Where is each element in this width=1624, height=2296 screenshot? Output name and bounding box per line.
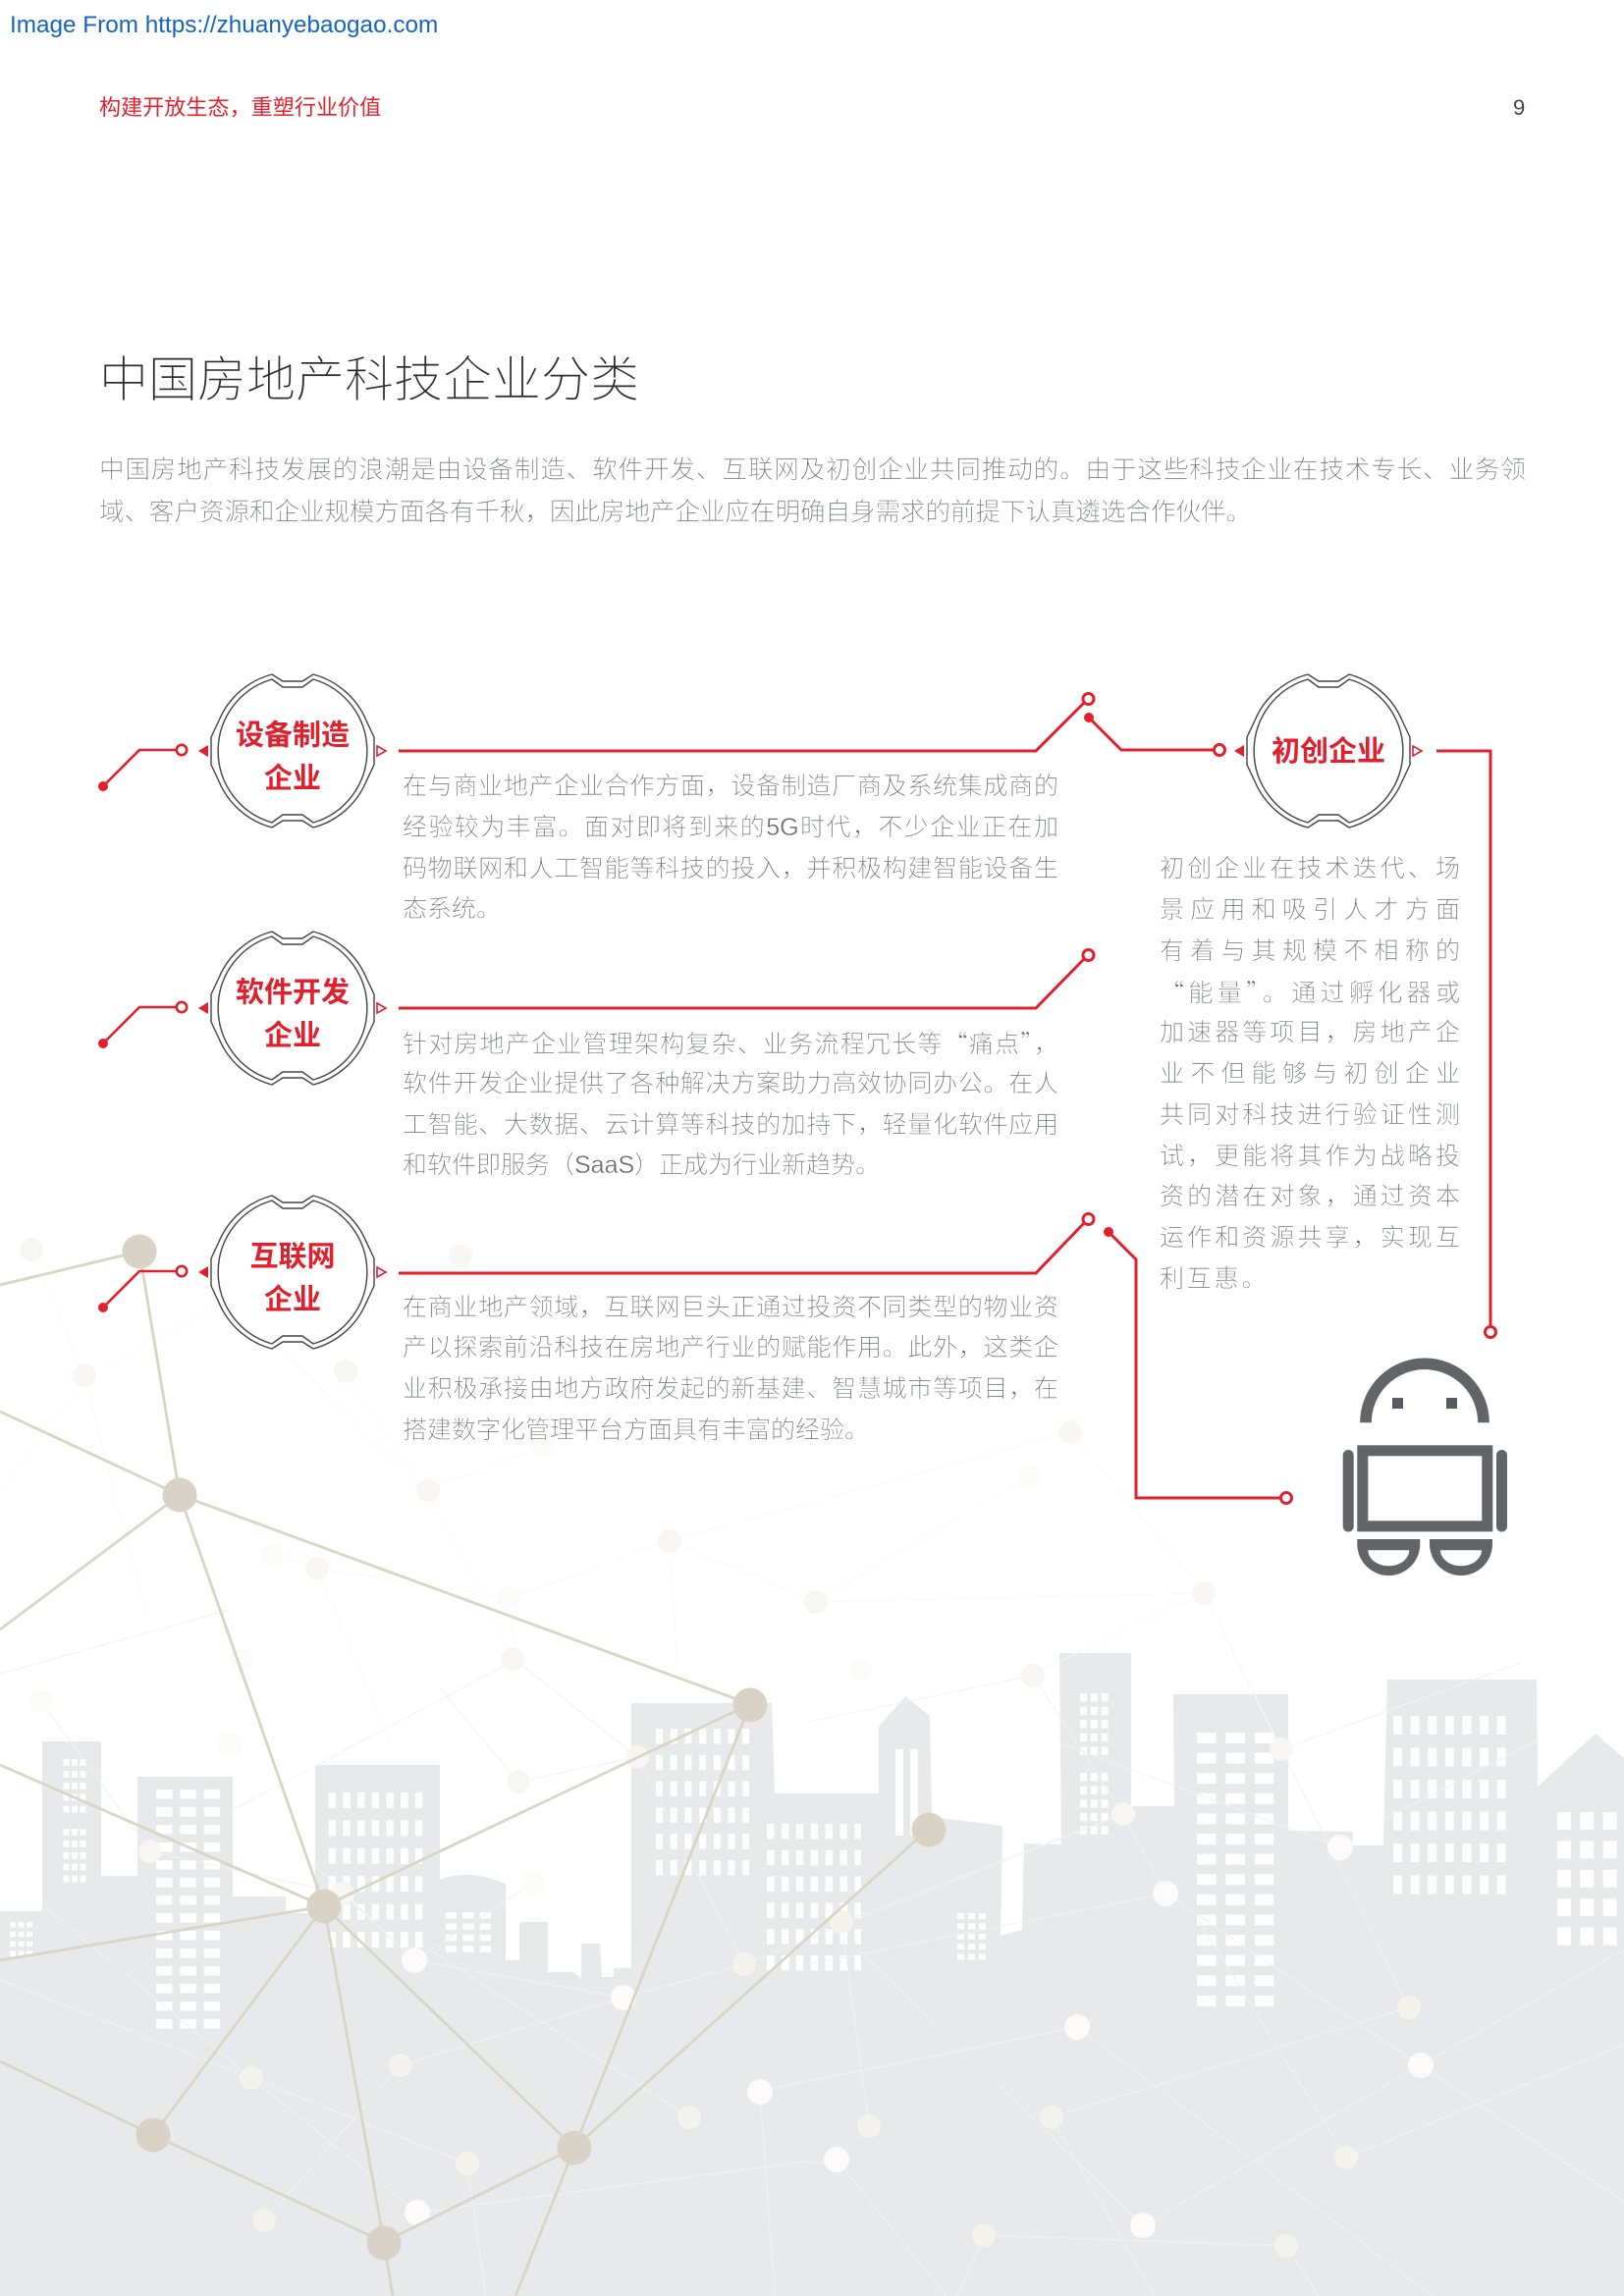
paragraph: 初创企业: 景应用和吸引人才方面 [1160,896,1460,924]
connector: 互联网 [399,1213,1094,1273]
section header: 构建开放生态，重塑行业价值 [99,95,381,120]
paragraph: 初创企业: 试，更能将其作为战略投 [1160,1143,1460,1170]
badge: 设备制造企业 [98,674,386,828]
paragraph: 初创企业: 共同对科技进行验证性测 [1160,1101,1460,1129]
paragraph: 初创企业: 业不但能够与初创企业 [1160,1060,1460,1088]
city skyline [0,1653,1624,2296]
paragraph: 初创企业: 运作和资源共享，实现互 [1160,1224,1460,1252]
badge: 软件开发企业 [98,932,386,1085]
badge: 软件开发企业: 企业 [264,1019,321,1052]
connector: 初创企业 down to robot [1436,751,1496,1337]
paragraph: 软件开发企业: 软件开发企业提供了各种解决方案助力高效协同办公。在人 [403,1070,1058,1097]
paragraph: 软件开发企业: 工智能、大数据、云计算等科技的加持下，轻量化软件应用 [403,1111,1058,1139]
paragraph: 初创企业 [1160,855,1460,1293]
paragraph: 设备制造企业: 在与商业地产企业合作方面，设备制造厂商及系统集成商的 [403,773,1058,800]
paragraph: 设备制造企业 [403,773,1058,923]
paragraph: 设备制造企业: 态系统。 [403,895,501,923]
paragraph: 初创企业: 利互惠。 [1160,1265,1269,1293]
icon: robot [1343,1363,1507,1575]
badge: 互联网企业: 企业 [264,1284,321,1315]
badge: 互联网企业: 互联网 [249,1241,336,1272]
badge: 设备制造企业: 企业 [264,762,321,795]
paragraph: 初创企业: 加速器等项目，房地产企 [1160,1019,1460,1046]
title: 中国房地产科技企业分类 [99,352,639,407]
connector: down to robot [1104,1227,1292,1504]
badge: 互联网企业 [98,1196,386,1349]
faint network lines [0,1250,1624,2296]
paragraph: 设备制造企业: 码物联网和人工智能等科技的投入，并积极构建智能设备生 [403,855,1058,882]
paragraph: 互联网企业: 在商业地产领域，互联网巨头正通过投资不同类型的物业资 [403,1294,1058,1321]
intro text: 中国房地产科技发展的浪潮是由设备制造、软件开发、互联网及初创企业共同推动的。由于这些科技企业在技术专长、业务领 [99,456,1526,484]
paragraph: 软件开发企业: 和软件即服务（SaaS）正成为行业新趋势。 [403,1151,880,1179]
paragraph: 初创企业: 有着与其规模不相称的 [1160,937,1460,965]
badge: 初创企业: 初创企业 [1272,735,1385,768]
faint network nodes [20,1238,1434,2258]
paragraph: 互联网企业: 搭建数字化管理平台方面具有丰富的经验。 [403,1416,869,1444]
paragraph: 互联网企业 [403,1294,1058,1444]
page number: 9 [1513,95,1525,120]
paragraph: 互联网企业: 产以探索前沿科技在房地产行业的赋能作用。此外，这类企 [403,1334,1058,1362]
main network lines and nodes [0,1235,947,2296]
paragraph: 软件开发企业 [403,1025,1058,1179]
connector: 设备制造 to top right [399,693,1094,751]
badge: 软件开发企业: 软件开发 [236,976,350,1009]
badge: 设备制造企业: 设备制造 [236,719,350,752]
intro text [99,456,1526,526]
paragraph: 初创企业: “能量”。通过孵化器或 [1160,974,1460,1009]
connector: into 初创企业 [1084,713,1225,756]
connector: 软件开发 [399,950,1094,1008]
paragraph: 互联网企业: 业积极承接由地方政府发起的新基建、智慧城市等项目，在 [403,1375,1058,1403]
image source label: Image From https://zhuanyebaogao.com [10,12,438,37]
paragraph: 设备制造企业: 经验较为丰富。面对即将到来的5G时代，不少企业正在加 [403,814,1058,841]
connector lines [399,693,1496,1504]
paragraph: 初创企业: 资的潜在对象，通过资本 [1160,1183,1460,1210]
badge: 初创企业 [1234,674,1422,828]
intro text: 域、客户资源和企业规模方面各有千秋，因此房地产企业应在明确自身需求的前提下认真遴选合作伙伴。 [99,499,1251,526]
paragraph: 软件开发企业: 针对房地产企业管理架构复杂、业务流程冗长等“痛点”， [403,1025,1058,1060]
paragraph: 初创企业: 初创企业在技术迭代、场 [1160,855,1460,882]
